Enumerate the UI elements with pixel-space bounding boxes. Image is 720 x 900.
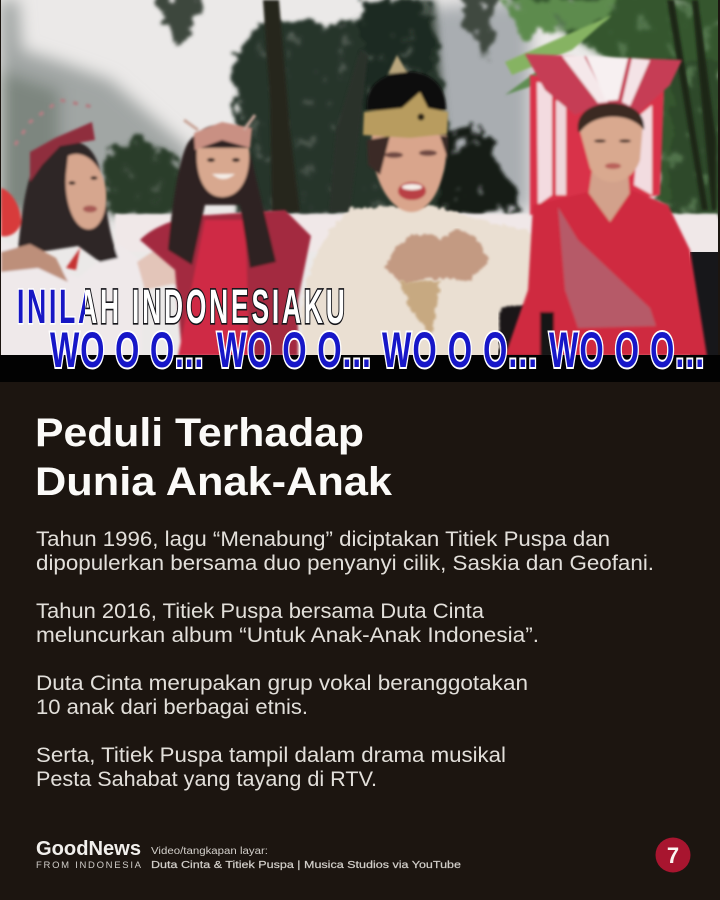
paragraph: Pesta Sahabat: Serta, Titiek Puspa tampil dalam drama musikal bbox=[36, 744, 506, 767]
headdress panel bbox=[530, 75, 664, 215]
forest underlay bbox=[112, 0, 720, 215]
panel: video still photo bbox=[0, 0, 720, 356]
sky background bbox=[0, 0, 720, 356]
paragraph: album 2016 bbox=[36, 600, 539, 647]
neck and face bbox=[588, 170, 630, 222]
white wall bbox=[114, 212, 718, 228]
logo: GoodNews from Indonesia: GoodNews bbox=[36, 838, 141, 860]
paragraph: Pesta Sahabat: Pesta Sahabat yang tayang di RTV. bbox=[36, 768, 377, 791]
page number badge: 7 bbox=[667, 843, 679, 868]
figure: middle girl in red bbox=[140, 115, 311, 356]
paragraph: Duta Cinta: 10 anak dari berbagai etnis. bbox=[36, 696, 308, 719]
title: Dunia Anak-Anak bbox=[35, 460, 393, 504]
photo credit: Duta Cinta & Titiek Puspa | Musica Studios via YouTube bbox=[151, 860, 462, 871]
title: Peduli Terhadap bbox=[35, 411, 364, 455]
page number badge bbox=[656, 838, 690, 872]
tree trunks and bamboo bbox=[263, 0, 716, 212]
crown bbox=[30, 122, 95, 182]
logo: GoodNews from Indonesia: FROM INDONESIA bbox=[36, 860, 142, 871]
paragraph: lagu Menabung bbox=[36, 528, 654, 575]
paragraph: Duta Cinta: Duta Cinta merupakan grup vokal beranggotakan bbox=[36, 672, 528, 695]
title bbox=[35, 411, 393, 504]
body text block bbox=[36, 528, 654, 791]
paragraph: lagu Menabung: dipopulerkan bersama duo penyanyi cilik, Saskia dan Geofani. bbox=[36, 552, 654, 575]
karaoke lyric line two: WO O O... bbox=[217, 321, 371, 378]
paragraph: Pesta Sahabat bbox=[36, 744, 506, 791]
paragraph: album 2016: Tahun 2016, Titiek Puspa bersama Duta Cinta bbox=[36, 600, 484, 623]
photo credit bbox=[151, 846, 462, 871]
paragraph: album 2016: meluncurkan album “Untuk Anak-Anak Indonesia”. bbox=[36, 624, 539, 647]
karaoke lyric line one: INILAH INDONESIAKU bbox=[17, 281, 345, 334]
karaoke lyric line two: WO O O... bbox=[549, 321, 704, 378]
logo: GoodNews from Indonesia bbox=[36, 838, 142, 871]
paragraph: Duta Cinta bbox=[36, 672, 528, 719]
black band under photo bbox=[0, 355, 720, 382]
forest trees bbox=[104, 0, 720, 215]
karaoke lyric line two: WO O O... bbox=[382, 321, 537, 378]
photo credit: Video/tangkapan layar: bbox=[151, 846, 268, 857]
headdress top bbox=[525, 54, 682, 115]
karaoke lyric line two: WO O O... bbox=[50, 321, 203, 378]
red dress bbox=[505, 190, 707, 356]
dark bench at right bbox=[690, 252, 718, 356]
misty hill bbox=[0, 0, 530, 215]
figure: right girl with red striped headdress bbox=[505, 54, 707, 356]
bright leaf bbox=[505, 15, 612, 95]
figure: left girl with red crown bbox=[1, 98, 177, 290]
karaoke lyric line two bbox=[50, 321, 704, 378]
paragraph: lagu Menabung: Tahun 1996, lagu “Menabung” diciptakan Titiek Puspa dan bbox=[36, 528, 610, 551]
figure: woman in white kebaya with gold crown bbox=[296, 54, 532, 355]
